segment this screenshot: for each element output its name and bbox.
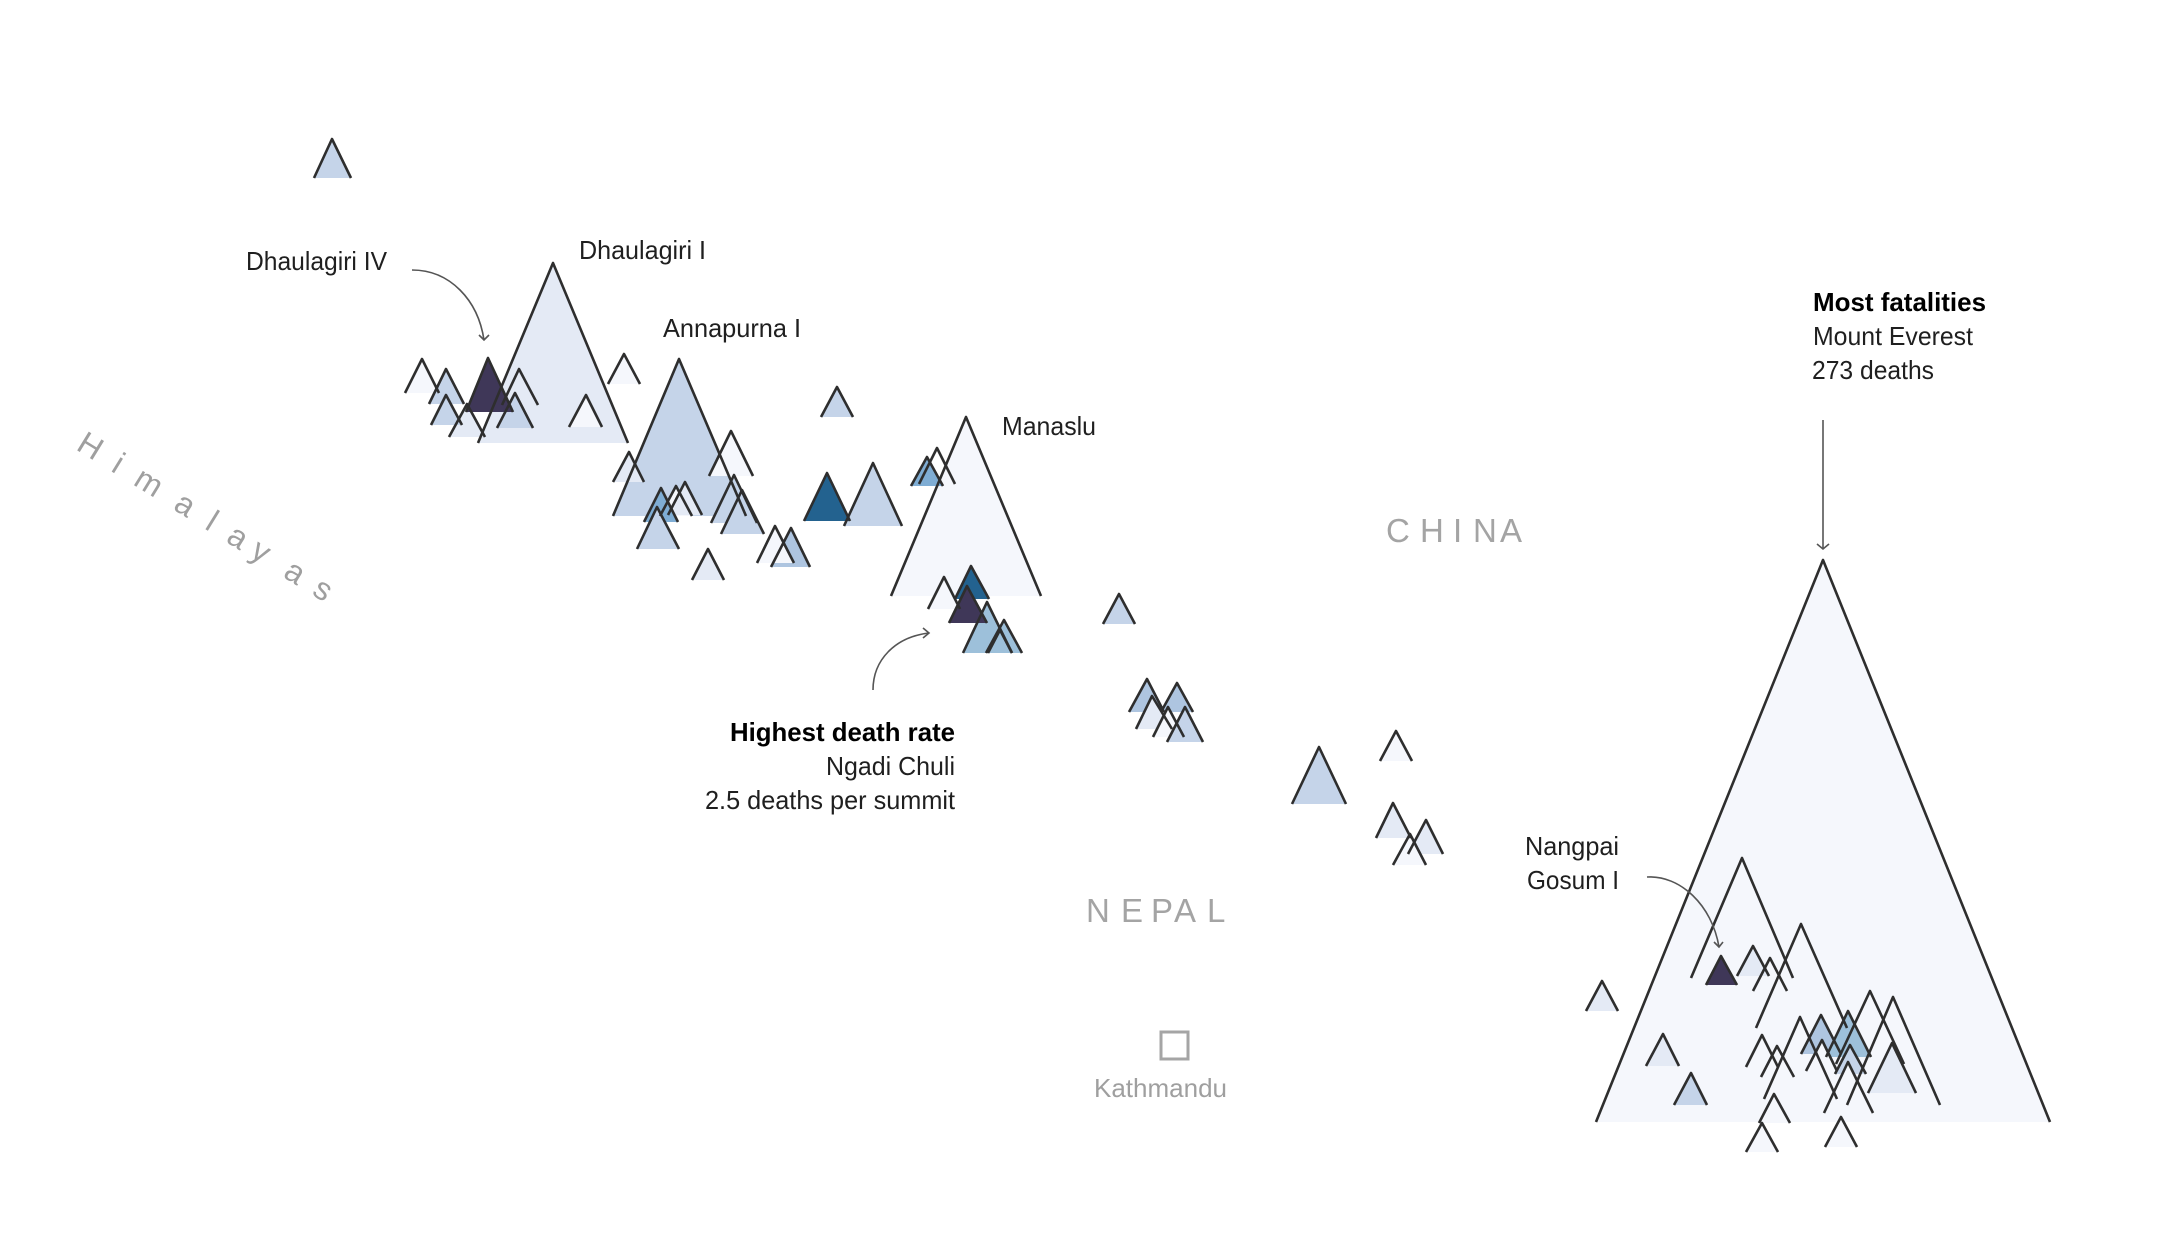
peak: Annapurna I: [613, 359, 746, 516]
peak: Mount Everest: [1596, 560, 2050, 1122]
peak outlines: central cluster: [1103, 594, 1443, 865]
label: Himalayas: Himalayas: [71, 424, 340, 608]
peak: Ngadi Chuli: [949, 586, 987, 623]
icon: Kathmandu square marker: [1161, 1032, 1188, 1059]
callout: most fatalities: Mount Everest: [1813, 321, 1974, 351]
peak: Nangpai Gosum I: [1706, 956, 1737, 985]
peak: Manaslu: [891, 417, 1041, 596]
peak outlines: Dhaulagiri group: [314, 139, 640, 443]
callout: most fatalities: Most fatalities: [1813, 287, 1986, 317]
peak outlines: Annapurna group: [613, 359, 902, 580]
label: Dhaulagiri I: Dhaulagiri I: [579, 235, 706, 265]
peak outlines: Everest group: [1586, 560, 2050, 1152]
arrow: to Dhaulagiri IV: [412, 270, 489, 340]
callout: highest death rate: Highest death rate: [730, 717, 955, 747]
callout: most fatalities: [1812, 287, 1986, 385]
callout: highest death rate: [705, 717, 956, 815]
arrow: to Mount Everest: [1817, 420, 1829, 549]
callout: highest death rate: 2.5 deaths per summit: [705, 785, 956, 815]
label: Dhaulagiri IV: Dhaulagiri IV: [246, 246, 388, 276]
peak: Dhaulagiri IV: [466, 358, 513, 412]
callout: most fatalities: 273 deaths: [1812, 355, 1934, 385]
label: China: CHINA: [1386, 512, 1522, 549]
peak: Dhaulagiri I: [478, 263, 628, 443]
callout: highest death rate: Ngadi Chuli: [826, 751, 955, 781]
peak fills layer: [314, 139, 2050, 1152]
arrow: to Ngadi Chuli: [873, 628, 929, 690]
label: Manaslu: Manaslu: [1002, 411, 1096, 441]
label: Kathmandu: Kathmandu: [1094, 1073, 1227, 1103]
label: Nangpai Gosum I: Gosum I: [1527, 865, 1619, 895]
label: Nangpai Gosum I: [1525, 831, 1619, 895]
label: Annapurna I: Annapurna I: [663, 313, 801, 343]
label: Nangpai Gosum I: Nangpai: [1525, 831, 1619, 861]
arrow: to Nangpai Gosum I: [1647, 877, 1723, 947]
peak outlines: Manaslu group: [891, 417, 1041, 653]
label: Nepal: NEPAL: [1086, 892, 1225, 929]
